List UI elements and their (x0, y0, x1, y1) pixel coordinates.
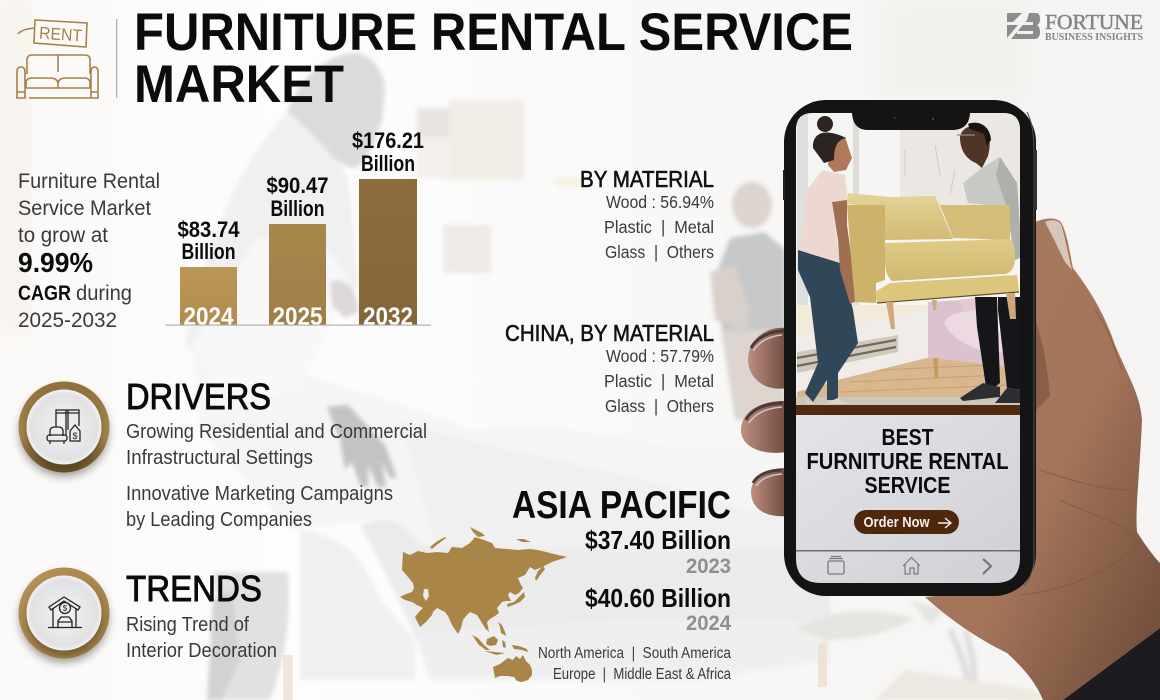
by material block: BY MATERIAL (580, 166, 714, 192)
pink chair (928, 300, 1007, 367)
Japan (507, 592, 525, 607)
baby figure behind phone (710, 182, 785, 420)
bar 2025: $90.47 (266, 173, 328, 198)
notch (852, 113, 970, 130)
driver text 1 (126, 420, 427, 469)
bar 2024: 2024 (184, 303, 234, 331)
region block: Asia Pacific: North America | South America (538, 645, 731, 662)
bar 2032 (352, 128, 424, 331)
bar 2025: Billion (270, 196, 324, 221)
china by material block (505, 320, 714, 416)
CAGR text block: to grow at (18, 224, 108, 247)
icon: trends badge (18, 568, 110, 658)
brown band (796, 405, 1020, 416)
bed and duvet (192, 325, 830, 640)
icon: rent sign over sofa (17, 20, 98, 98)
bar 2032: Billion (361, 151, 415, 176)
icon: drivers badge: $ (72, 431, 78, 441)
region block: Asia Pacific: 2023 (686, 555, 731, 578)
seated man silhouette (185, 53, 397, 700)
bar 2032: $176.21 (352, 128, 424, 153)
heading: trends: TRENDS (126, 568, 262, 609)
floor (797, 358, 1020, 397)
order now button (854, 510, 959, 534)
icon: trends badge: $ (63, 604, 68, 613)
title (134, 3, 853, 114)
bar chart (165, 128, 431, 331)
CAGR text block: Service Market (18, 197, 151, 220)
region block: Asia Pacific: $37.40 Billion (585, 525, 731, 555)
china by material block: Wood : 57.79% (606, 346, 714, 366)
driver text 1: Growing Residential and Commercial (126, 420, 427, 443)
driver text 2: by Leading Companies (126, 508, 312, 531)
CAGR text block: during (76, 282, 132, 305)
hand behind phone (925, 218, 1160, 700)
CAGR text block: 2025-2032 (18, 309, 117, 332)
man (957, 123, 1022, 403)
by material block: Plastic | Metal (604, 217, 714, 237)
sofa (847, 193, 1019, 329)
region block: Asia Pacific: $40.60 Billion (585, 583, 731, 613)
phone photo: couple carrying sofa (796, 113, 1022, 405)
region block: Asia Pacific: 2024 (686, 612, 731, 635)
region block: Asia Pacific: ASIA PACIFIC (512, 484, 731, 527)
CAGR text block: CAGR (18, 282, 71, 305)
china by material block: Plastic | Metal (604, 371, 714, 391)
order now button: Order Now (864, 514, 930, 531)
map: Asia Pacific (400, 527, 567, 682)
bar 2025 (266, 173, 328, 331)
driver text 2: Innovative Marketing Campaigns (126, 482, 393, 505)
Sakhalin and Kamchatka (535, 566, 545, 581)
icon: chevron (983, 559, 991, 574)
Southeast Asia islands (472, 622, 528, 655)
arctic islands (430, 527, 531, 549)
app heading: SERVICE (864, 472, 950, 498)
driver text 2 (126, 482, 393, 531)
fingers on left of phone (741, 328, 787, 516)
title: MARKET (134, 55, 344, 114)
panel: trends (18, 568, 277, 662)
bar 2025: 2025 (272, 303, 323, 331)
region block: Asia Pacific (512, 484, 731, 683)
logo: Fortune Business Insights (1007, 10, 1143, 43)
window sill and wall (797, 305, 928, 338)
phone (783, 100, 1037, 596)
region block: Asia Pacific: Europe | Middle East & Africa (553, 666, 731, 683)
CAGR text block: Furniture Rental (18, 170, 160, 193)
app panel (796, 415, 1020, 583)
woman (798, 116, 858, 404)
bar 2024: $83.74 (178, 217, 240, 242)
bar 2024 (178, 217, 240, 331)
CAGR text block: 9.99% (18, 247, 93, 278)
icon: tabs (828, 556, 844, 574)
shelf with box and books (417, 100, 585, 273)
china by material block: CHINA, BY MATERIAL (505, 320, 714, 346)
logo: Fortune Business Insights: FORTUNE (1045, 10, 1143, 34)
trends text (126, 613, 277, 662)
by material block (580, 166, 714, 262)
trends text: Interior Decoration (126, 639, 277, 662)
header (17, 3, 1143, 114)
icon: home (903, 558, 920, 574)
icon: rent sign over sofa: RENT (38, 24, 83, 46)
Australia (493, 655, 532, 682)
trends text: Rising Trend of (126, 613, 249, 636)
driver text 1: Infrastructural Settings (126, 446, 313, 469)
plant and box (795, 600, 1045, 700)
app heading: BEST (882, 424, 934, 450)
by material block: Wood : 56.94% (606, 192, 714, 212)
by material block: Glass | Others (605, 242, 714, 262)
icon: drivers badge (18, 382, 110, 472)
bar 2032: 2032 (363, 303, 413, 331)
app heading (806, 424, 1008, 498)
china by material block: Glass | Others (605, 396, 714, 416)
app heading: FURNITURE RENTAL (806, 448, 1008, 474)
title: FURNITURE RENTAL SERVICE (134, 3, 853, 62)
CAGR text block (18, 170, 160, 332)
panel: drivers (18, 376, 427, 531)
bar 2024: Billion (182, 239, 236, 264)
heater vent (797, 335, 898, 373)
phone body (784, 100, 1036, 596)
heading: drivers: DRIVERS (126, 376, 271, 417)
logo: Fortune Business Insights: BUSINESS INSIGHTS (1045, 32, 1143, 43)
